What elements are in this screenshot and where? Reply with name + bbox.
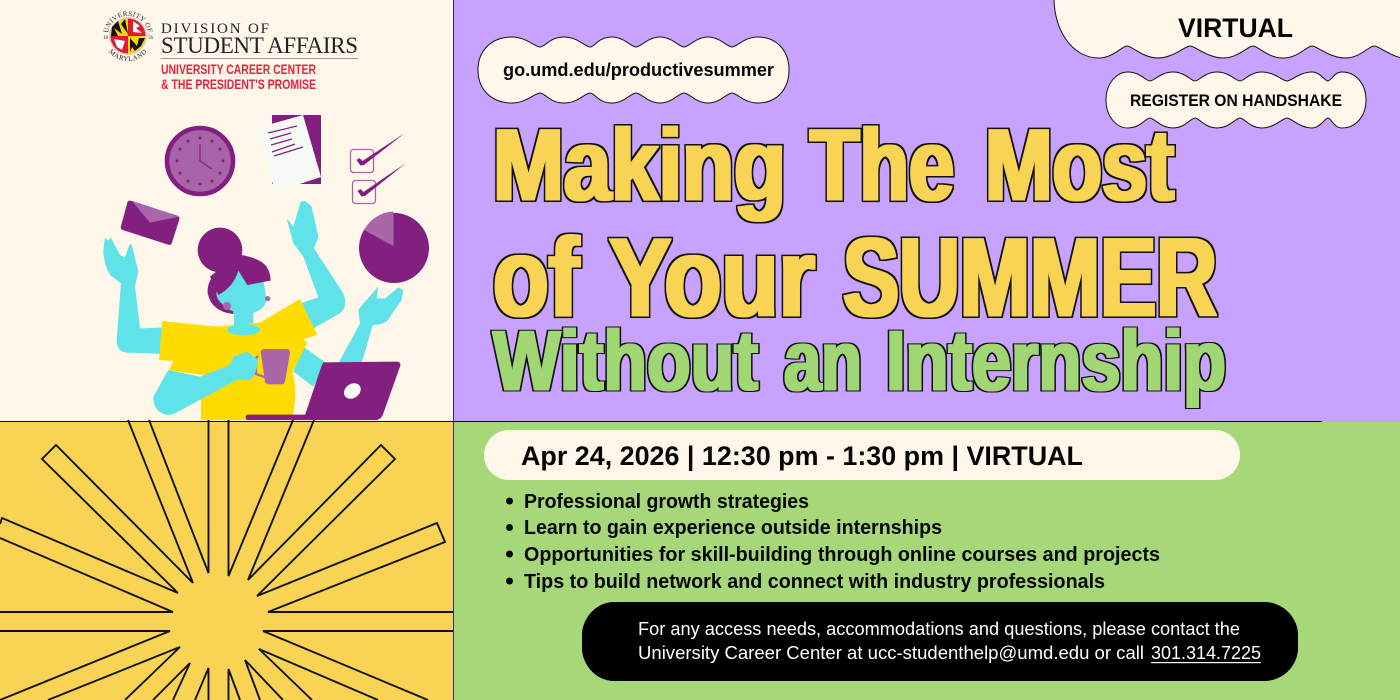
University Career Center tagline: UNIVERSITY CAREER CENTER [161, 61, 316, 77]
badge: URL: go.umd.edu/productivesummer [503, 60, 774, 80]
badge: register on Handshake [1106, 72, 1366, 128]
icon: clock [167, 128, 233, 194]
University of Maryland seal: 18 [103, 36, 108, 41]
bullet list: Learn to gain experience outside internships [524, 517, 942, 539]
badge: virtual: VIRTUAL [1178, 13, 1293, 43]
mug [256, 349, 290, 384]
bullet list [506, 491, 1160, 593]
hair back [208, 272, 240, 314]
accessibility contact callout: For any access needs, accommodations and questions, please contact the [638, 619, 1240, 639]
hair front [210, 255, 271, 295]
University Career Center tagline [161, 61, 316, 92]
title line 1: The [810, 108, 954, 222]
catching arm [338, 287, 403, 363]
hair bun [198, 228, 242, 272]
laptop [246, 362, 400, 420]
University of Maryland seal: MARYLAND [108, 48, 146, 62]
vertical panel divider [453, 0, 454, 700]
University of Maryland seal [103, 11, 154, 62]
date bar: Apr 24, 2026 | 12:30 pm - 1:30 pm | VIRTUAL [521, 441, 1083, 471]
Division of Student Affairs wordmark: DIVISION OF [161, 21, 269, 37]
accessibility contact callout [582, 602, 1298, 681]
title line 3: Without [493, 314, 758, 409]
panel: logo and illustration [0, 0, 453, 421]
raised left arm [103, 237, 165, 354]
accessibility contact callout: 301.314.7225 [1151, 643, 1261, 663]
panel: sunburst [0, 421, 453, 700]
bullet list: Tips to build network and connect with industry professionals [524, 571, 1105, 593]
panel: lavender title [453, 0, 1400, 423]
University of Maryland seal: UNIVERSITY OF [103, 11, 153, 32]
panel: green details [453, 422, 1400, 700]
title line 1: Most [985, 108, 1174, 222]
face [216, 270, 267, 314]
badge: URL [478, 37, 789, 103]
Division of Student Affairs wordmark [161, 21, 358, 59]
title line 3 [493, 314, 1226, 409]
title line 3: an [784, 314, 862, 409]
logo [103, 11, 358, 92]
University of Maryland seal: 56 [148, 36, 154, 41]
Division of Student Affairs wordmark: STUDENT AFFAIRS [161, 33, 358, 58]
University Career Center tagline: & THE PRESIDENT'S PROMISE [161, 76, 316, 92]
title line 2: of [493, 215, 580, 340]
shirt [159, 299, 317, 420]
accessibility contact callout: University Career Center at ucc-studenthelp@umd.edu or call [638, 643, 1144, 663]
coffee arm [153, 352, 258, 415]
title line 1 [493, 108, 1174, 222]
date bar [484, 430, 1240, 480]
sunburst rays [0, 420, 453, 700]
badge: virtual [1054, 0, 1400, 58]
icon: checklist [350, 133, 406, 204]
icon: envelope [121, 201, 179, 245]
illustration: woman juggling tasks [103, 201, 403, 420]
icon: pie chart [359, 212, 429, 283]
title line 1: Making [493, 108, 786, 222]
neck [234, 307, 253, 330]
earrings [223, 296, 270, 310]
collar [227, 324, 260, 335]
bullet list: Opportunities for skill-building through online courses and projects [524, 544, 1160, 566]
title line 2: Your [609, 215, 815, 340]
horizontal panel divider [0, 421, 1322, 422]
icon: document [257, 115, 321, 192]
bullet list: Professional growth strategies [524, 491, 809, 513]
title [493, 108, 1226, 409]
title line 3: Internship [886, 314, 1226, 409]
raised right arm [287, 201, 345, 328]
title line 2 [493, 215, 1217, 340]
back arm right [293, 347, 327, 387]
badge: register on Handshake: REGISTER ON HANDSHAKE [1130, 92, 1342, 110]
title line 2: SUMMER [843, 215, 1217, 340]
